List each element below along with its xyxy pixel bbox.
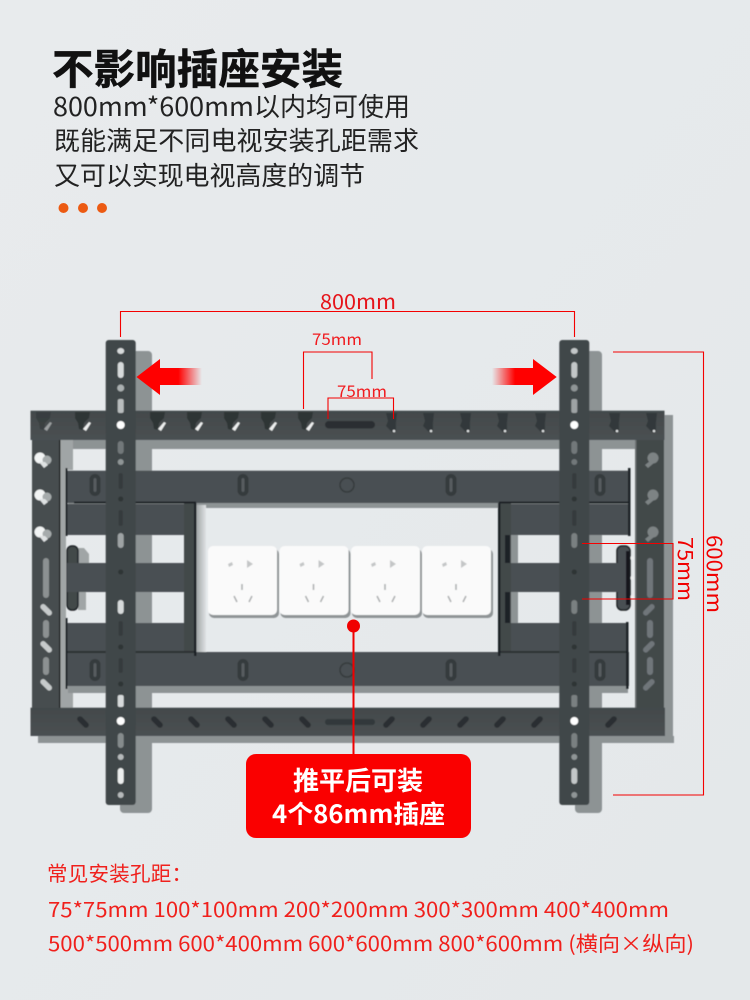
dimension: 600mm	[613, 352, 731, 795]
dimension: 75mm lower	[328, 380, 394, 419]
text block: description: 800mm*600mm	[53, 87, 254, 124]
callout: 推平后可装	[293, 761, 423, 798]
text block: description: 既能满足不同电视安装孔距需求	[54, 121, 419, 158]
heading: common hole spacing: 常见安装孔距：	[47, 857, 192, 887]
bar screw slots	[90, 474, 100, 496]
panel: sliding arms	[66, 468, 634, 689]
socket 1	[208, 546, 279, 618]
callout leader	[347, 620, 360, 756]
text block: hole spacing list: 500*500mm 600*400mm 600*600mm 800*600mm (横向×纵向)	[48, 927, 694, 957]
dimension: 800mm	[120, 286, 574, 337]
text block: description: 以内均可使用	[254, 87, 410, 124]
dimension: 75mm lower: 75mm	[337, 380, 387, 402]
dimension: 600mm: 600mm	[701, 535, 731, 613]
right frame holes	[642, 452, 658, 692]
callout: 4个86mm插座	[272, 795, 445, 831]
arrow: left	[136, 359, 202, 395]
dimension: 75mm right: 75mm	[672, 537, 702, 601]
panel: wall plate frame	[30, 411, 665, 736]
socket 3	[351, 546, 422, 618]
dimension: 75mm upper: 75mm	[312, 328, 362, 350]
dimension: 800mm: 800mm	[320, 286, 396, 315]
left vertical bracket	[106, 340, 136, 805]
mount illustration	[30, 340, 674, 813]
dimension: 75mm upper	[304, 328, 372, 409]
arrow: right	[492, 359, 557, 395]
callout	[246, 754, 471, 838]
text block: hole spacing list	[48, 893, 694, 957]
dimension: 75mm right	[582, 537, 702, 601]
left frame holes	[34, 452, 53, 692]
text block: description	[53, 87, 419, 193]
decorative orange dots	[58, 203, 107, 213]
text block: hole spacing list: 75*75mm 100*100mm 200*200mm 300*300mm 400*400mm	[48, 893, 669, 923]
right clip behind arm	[617, 546, 630, 610]
cast shadows	[38, 351, 674, 813]
right arm	[499, 503, 628, 655]
upper and lower bars	[67, 471, 629, 503]
text block: description: 又可以实现电视高度的调节	[54, 156, 365, 193]
left clip behind arm	[67, 546, 78, 610]
right vertical bracket	[559, 340, 589, 805]
title: 不影响插座安装	[52, 36, 343, 96]
panel: four wall sockets	[208, 546, 493, 618]
socket 4	[422, 546, 493, 618]
dark edges	[66, 468, 630, 689]
top rail holes	[36, 412, 657, 433]
left arm	[67, 503, 195, 655]
socket 2	[280, 546, 350, 618]
bottom rail holes	[76, 715, 618, 729]
